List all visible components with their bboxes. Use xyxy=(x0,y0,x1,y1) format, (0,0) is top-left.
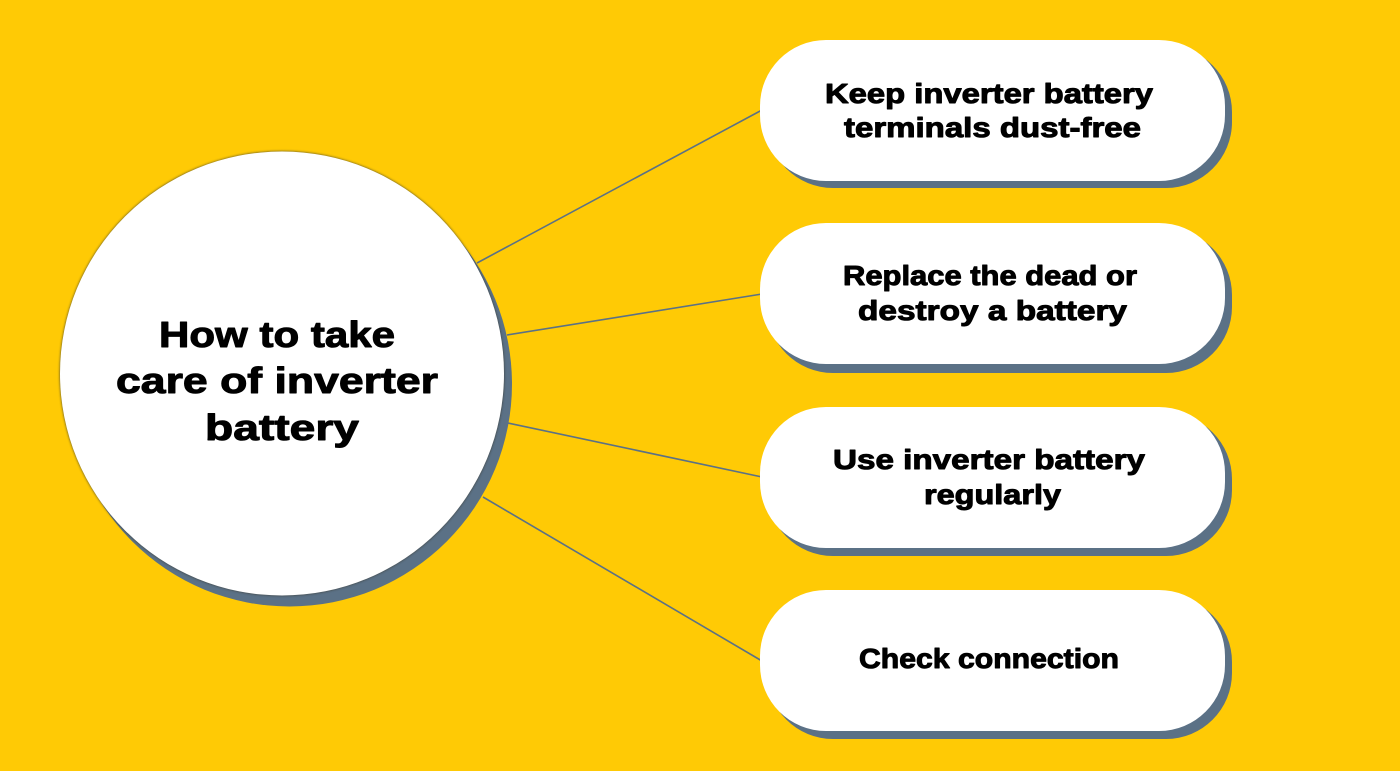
pill 3 text: regularly xyxy=(924,479,1061,510)
pill 3 text: Use inverter battery xyxy=(833,444,1145,475)
pill 1 text: Keep inverter battery xyxy=(825,78,1154,109)
pill 2 text: Replace the dead or xyxy=(843,260,1137,291)
pill 1: terminals xyxy=(760,40,1232,188)
pill 1 text: terminals dust-free xyxy=(844,112,1141,143)
central title: How to take xyxy=(159,314,395,355)
pill 3 text xyxy=(833,444,1145,510)
central circle xyxy=(60,151,512,606)
pill 2 text: destroy a battery xyxy=(858,295,1128,326)
pill 2: replace xyxy=(760,223,1232,373)
central title: battery xyxy=(205,407,359,448)
connector lines xyxy=(477,110,762,661)
pill 2 text xyxy=(843,260,1137,326)
pill 4: check connection xyxy=(760,590,1232,739)
central title xyxy=(116,314,438,448)
pill 1 text xyxy=(825,78,1154,143)
central title: care of inverter xyxy=(116,360,438,401)
pill 4 text: Check connection xyxy=(859,643,1119,674)
pill 3: use regularly xyxy=(760,407,1232,556)
